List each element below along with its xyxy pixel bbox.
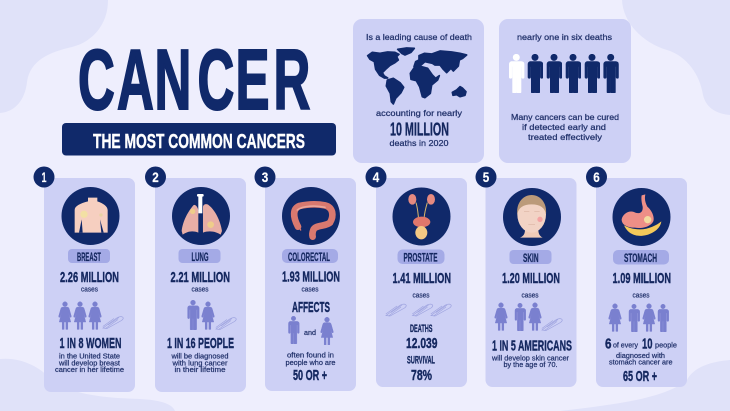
- number 2: [145, 166, 166, 188]
- panel: skin: [476, 166, 576, 387]
- panel: stomach: of every: [613, 342, 638, 350]
- panel: colorectal: 1.93 MILLION: [282, 268, 340, 286]
- label: BREAST: [77, 250, 101, 264]
- number 4: [366, 166, 386, 188]
- number 3: 3: [262, 169, 268, 185]
- panel: breast: in the United State: [59, 354, 120, 360]
- number 1: 1: [42, 169, 47, 185]
- label: [282, 249, 338, 264]
- panel: prostate: cases: [412, 292, 430, 300]
- panel: lung: cases: [192, 286, 209, 294]
- panel: colorectal: people who are: [286, 360, 336, 367]
- panel: skin: by the age of 70.: [504, 362, 558, 369]
- panel: lung: will be diagnosed: [170, 354, 229, 360]
- background blob: top right: [622, 0, 730, 115]
- number 3: [254, 166, 276, 188]
- people: [608, 304, 669, 332]
- number 6: 6: [593, 169, 600, 185]
- people: [494, 303, 562, 331]
- panel: stomach: [586, 166, 687, 387]
- panel: breast: 2.26 MILLION: [60, 269, 119, 286]
- panel: skin: 1 IN 5 AMERICANS: [492, 338, 572, 354]
- panel: lung: [145, 166, 246, 392]
- icon: world map: [368, 48, 467, 104]
- panel: leading cause of death: deaths in 2020: [390, 138, 449, 148]
- background blob: top left: [0, 0, 108, 113]
- panel: leading cause of death: Is a leading cause of death: [366, 32, 472, 42]
- panel: prostate: 12.039: [406, 335, 438, 352]
- panel: leading cause of death: [353, 19, 484, 163]
- background blob: bottom left: [0, 359, 175, 411]
- label: LUNG: [192, 250, 208, 264]
- panel: leading cause of death: accounting for nearly: [376, 108, 463, 118]
- panel: breast: will develop breast: [58, 360, 120, 368]
- label: [68, 249, 110, 264]
- panel: lung: 2.21 MILLION: [170, 269, 230, 286]
- label: [178, 249, 220, 264]
- title: CANCER: [78, 33, 310, 127]
- panel: prostate: SURVIVAL: [407, 354, 435, 366]
- label: STOMACH: [624, 251, 657, 265]
- panel: stomach: 6: [605, 336, 612, 352]
- subtitle banner: THE MOST COMMON CANCERS: [93, 131, 305, 153]
- icon: breast: [62, 187, 120, 245]
- background blob: bottom right: [560, 360, 730, 411]
- panel: prostate: 1.41 MILLION: [392, 270, 451, 287]
- panel: colorectal: 50 OR +: [293, 367, 327, 384]
- icon: prostate: [392, 188, 450, 246]
- panel: stomach: diagnosed with: [616, 353, 665, 360]
- icon: colon: [282, 187, 340, 245]
- subtitle banner: [62, 123, 336, 156]
- panel: colorectal: cases: [302, 286, 319, 294]
- number 4: 4: [373, 169, 379, 185]
- label: COLORECTAL: [288, 250, 330, 264]
- panel: one in six deaths: if detected early and: [522, 122, 606, 132]
- people: [288, 316, 334, 345]
- panel: colorectal: [254, 166, 356, 391]
- panel: prostate: [366, 166, 467, 387]
- panel: one in six deaths: treated effectively: [528, 132, 603, 142]
- panel: skin: will develop skin cancer: [491, 356, 570, 362]
- panel: stomach: people: [655, 342, 677, 350]
- panel: stomach: cases: [632, 292, 650, 300]
- panel: breast: cancer in her lifetime: [55, 367, 124, 374]
- panel: one in six deaths: Many cancers can be cured: [511, 112, 619, 122]
- panel: breast: [34, 166, 135, 392]
- number 6: [586, 166, 607, 188]
- panel: colorectal: often found in: [287, 352, 334, 360]
- number 5: 5: [483, 169, 489, 185]
- people: [58, 302, 123, 329]
- panel: prostate: 78%: [411, 367, 432, 384]
- number 1: [34, 166, 54, 188]
- label: [613, 250, 669, 265]
- panel: stomach: 10: [642, 336, 652, 352]
- icon: lungs: [172, 187, 230, 245]
- ribbons: [386, 304, 451, 316]
- panel: lung: 1 IN 16 PEOPLE: [167, 335, 234, 352]
- icon: six people: [509, 54, 619, 93]
- panel: prostate: DEATHS: [410, 323, 432, 335]
- panel: stomach: 65 OR +: [623, 368, 657, 385]
- panel: stomach: stomach cancer are: [609, 360, 673, 367]
- panel: one in six deaths: nearly one in six deaths: [517, 32, 612, 42]
- icon: stomach: [612, 188, 670, 246]
- panel: colorectal: AFFECTS: [292, 299, 330, 316]
- panel: stomach: 1.09 MILLION: [612, 270, 671, 287]
- panel: lung: with lung cancer: [171, 360, 228, 368]
- panel: leading cause of death: 10 MILLION: [390, 118, 449, 140]
- label: [510, 250, 552, 265]
- panel: lung: in their lifetime: [174, 367, 226, 374]
- people: [188, 300, 236, 330]
- icon: face: [503, 188, 561, 246]
- panel: one in six deaths: [499, 19, 631, 163]
- panel: skin: cases: [522, 292, 539, 300]
- panel: breast: 1 IN 8 WOMEN: [60, 335, 122, 352]
- label: PROSTATE: [404, 250, 438, 264]
- number 5: [476, 166, 496, 188]
- panel: breast: cases: [81, 286, 98, 294]
- panel: colorectal: and: [304, 330, 316, 337]
- label: SKIN: [523, 251, 538, 265]
- label: [398, 250, 444, 264]
- number 2: 2: [152, 169, 159, 185]
- panel: skin: 1.20 MILLION: [502, 270, 560, 287]
